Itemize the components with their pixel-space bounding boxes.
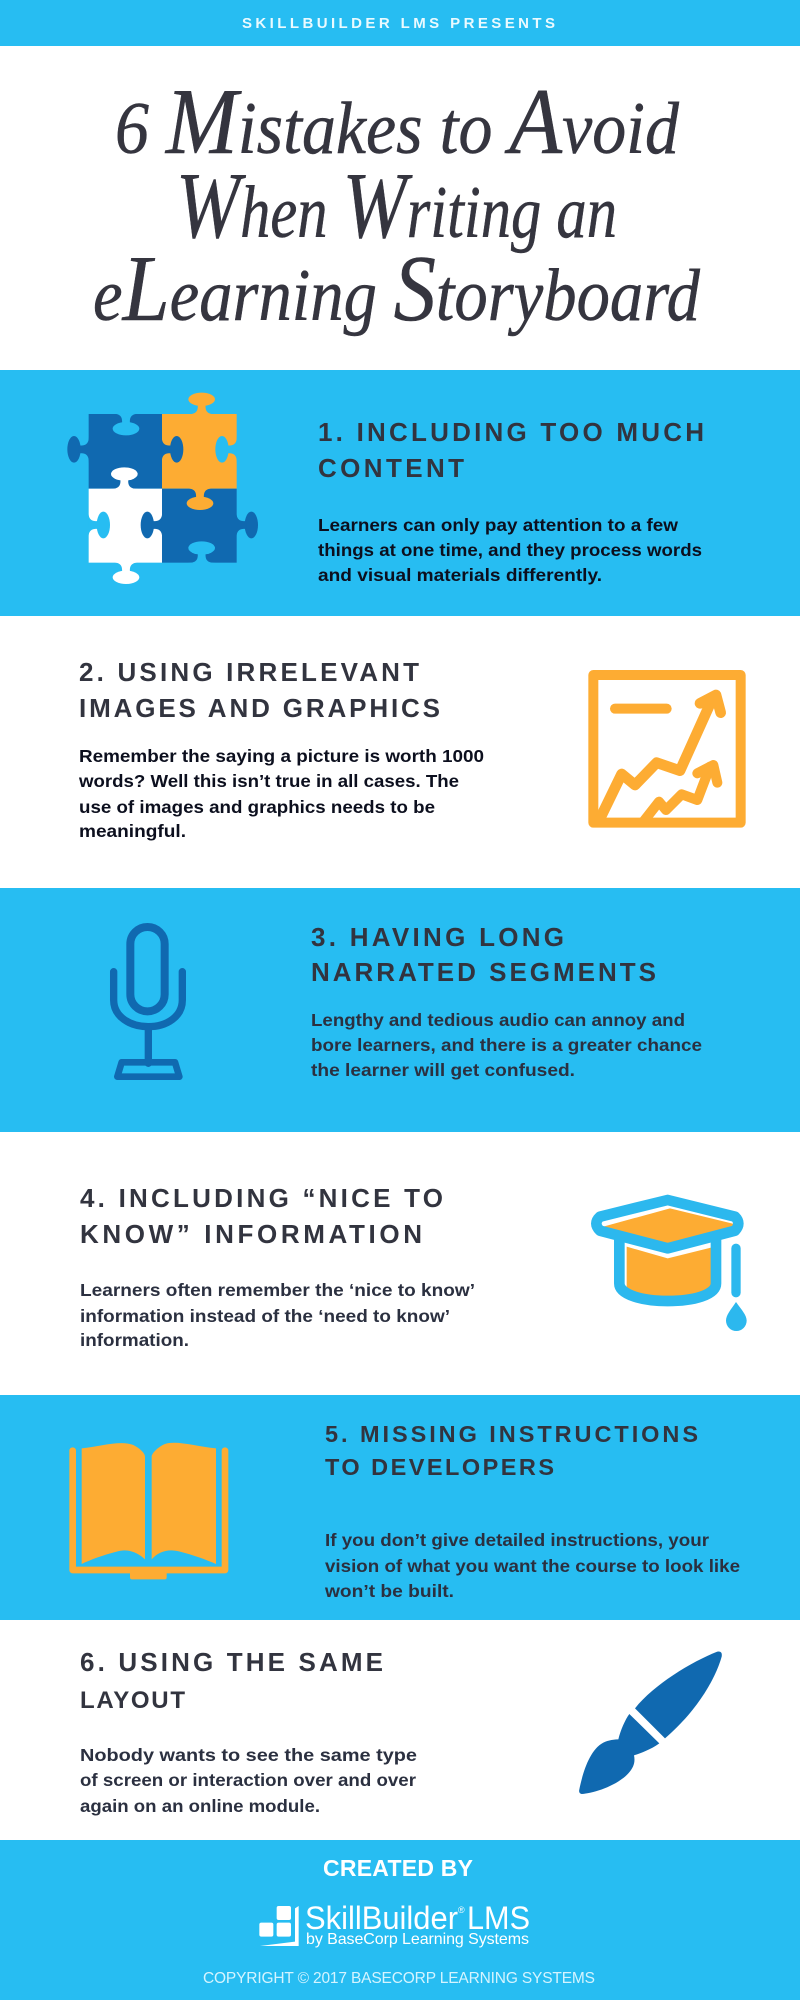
text: mistake 1 [318, 515, 702, 585]
title: 6 Mistakes to Avoid [115, 70, 680, 174]
heading: mistake 6: 6. USING THE SAME [80, 1647, 383, 1677]
heading: mistake 2 [79, 657, 440, 723]
heading: mistake 4: KNOW” INFORMATION [80, 1219, 422, 1249]
logo: SkillBuilder LMS: by BaseCorp Learning Systems [306, 1931, 529, 1948]
text: mistake 5: won’t be built. [324, 1581, 454, 1601]
text: mistake 6: again on an online module. [80, 1796, 320, 1816]
text: mistake 5: If you don’t give detailed instructions, your [325, 1530, 709, 1550]
icon: rising chart [593, 675, 741, 823]
logo: SkillBuilder LMS: SkillBuilder [305, 1900, 458, 1936]
logo: SkillBuilder LMS: ® [458, 1905, 465, 1915]
icon: graduation cap [596, 1200, 747, 1331]
text: mistake 5 [324, 1530, 740, 1601]
heading: mistake 4: 4. INCLUDING “NICE TO [80, 1183, 443, 1213]
icon: open book [73, 1443, 225, 1579]
text: mistake 5: vision of what you want the course to look like [325, 1556, 740, 1576]
heading: mistake 1 [318, 417, 704, 483]
text: mistake 2 [78, 746, 484, 841]
text: mistake 6: of screen or interaction over and over [80, 1770, 416, 1790]
top banner [0, 0, 800, 46]
top banner: SKILLBUILDER LMS PRESENTS [242, 15, 555, 32]
heading: mistake 1: 1. INCLUDING TOO MUCH [318, 417, 704, 447]
panel: mistake 2 [0, 616, 800, 888]
heading: mistake 5 [325, 1421, 698, 1480]
text: mistake 3: the learner will get confused. [311, 1060, 575, 1080]
heading: mistake 6: LAYOUT [80, 1687, 185, 1714]
text: mistake 2: words? Well this isn’t true in all cases. The [78, 771, 459, 791]
heading: mistake 3: NARRATED SEGMENTS [311, 957, 656, 987]
panel: mistake 1 [0, 370, 800, 616]
panel: mistake 6 [0, 1620, 800, 1840]
copyright: COPYRIGHT © 2017 BASECORP LEARNING SYSTEMS [203, 1970, 595, 1987]
text: mistake 1: Learners can only pay attention to a few [318, 515, 678, 535]
heading: mistake 2: IMAGES AND GRAPHICS [79, 693, 440, 723]
heading: mistake 4 [80, 1183, 443, 1249]
panel: mistake 3 [0, 888, 800, 1132]
panel: mistake 4 [0, 1132, 800, 1395]
heading: mistake 1: CONTENT [318, 453, 464, 483]
title: When Writing an [176, 154, 617, 258]
logo: SkillBuilder LMS [259, 1900, 530, 1948]
icon: paint brush [579, 1652, 722, 1794]
heading: created by: CREATED BY [323, 1855, 473, 1881]
icon: puzzle [67, 393, 258, 584]
text: mistake 2: use of images and graphics needs to be [79, 797, 435, 817]
text: mistake 4 [80, 1280, 475, 1350]
text: mistake 6: Nobody wants to see the same type [80, 1745, 417, 1765]
title: eLearning Storyboard [93, 237, 701, 341]
text: mistake 4: Learners often remember the ‘nice to know’ [80, 1280, 475, 1300]
text: mistake 2: meaningful. [79, 821, 186, 841]
text: mistake 1: and visual materials differently. [318, 565, 602, 585]
text: mistake 4: information. [80, 1330, 189, 1350]
panel: footer [0, 1840, 800, 2000]
text: mistake 4: information instead of the ‘need to know’ [80, 1306, 450, 1326]
text: mistake 2: Remember the saying a picture is worth 1000 [79, 746, 484, 766]
logo: SkillBuilder LMS: LMS [467, 1900, 530, 1936]
heading: mistake 2: 2. USING IRRELEVANT [79, 657, 419, 687]
heading: mistake 5: 5. MISSING INSTRUCTIONS [325, 1421, 698, 1447]
text: mistake 6 [80, 1745, 417, 1816]
heading: mistake 5: TO DEVELOPERS [325, 1454, 554, 1480]
text: mistake 1: things at one time, and they process words [318, 540, 702, 560]
icon: microphone [114, 927, 182, 1077]
panel: mistake 5 [0, 1395, 800, 1620]
heading: mistake 6 [80, 1647, 383, 1714]
text: mistake 3 [311, 1010, 702, 1080]
text: mistake 3: bore learners, and there is a greater chance [311, 1035, 702, 1055]
heading: mistake 3 [311, 922, 656, 987]
heading: mistake 3: 3. HAVING LONG [311, 922, 564, 952]
text: mistake 3: Lengthy and tedious audio can annoy and [311, 1010, 685, 1030]
title [93, 70, 701, 341]
